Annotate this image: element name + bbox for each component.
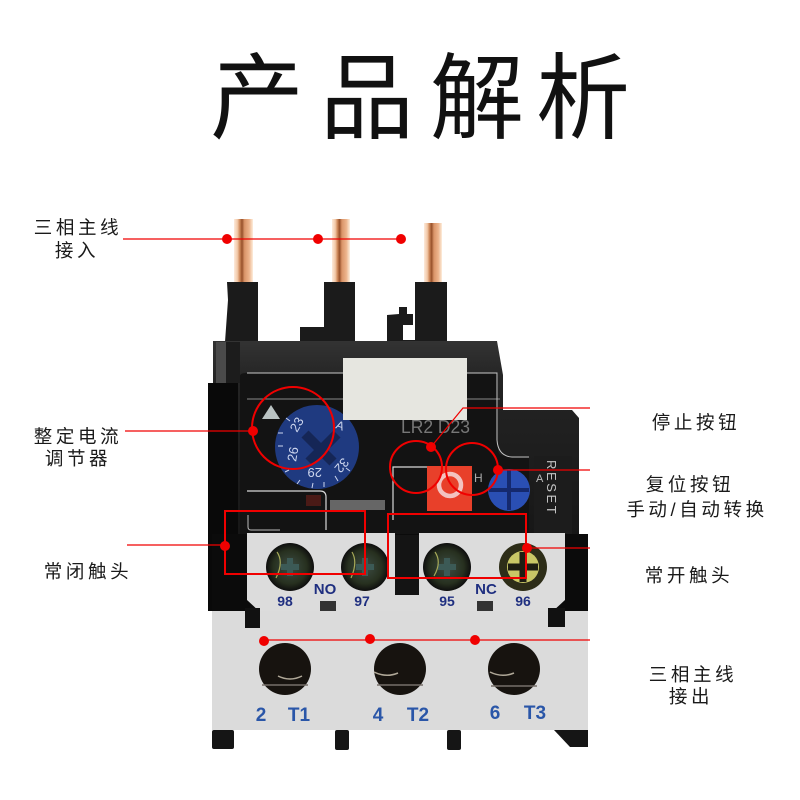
adjustment dial: 32 [331, 455, 352, 476]
lower grey terminal block: 4 [373, 705, 384, 726]
lower grey terminal block [212, 608, 588, 730]
left side wall [208, 383, 238, 611]
front panel [240, 373, 529, 534]
relay upper housing [213, 341, 579, 534]
adjustment dial: A [334, 418, 346, 434]
label: reset button and mode switch: 手动/自动转换 [626, 499, 768, 520]
callout: normally closed contacts [127, 511, 365, 574]
feet [212, 730, 588, 750]
H marker: H [474, 471, 483, 485]
title: 产 [210, 46, 304, 151]
callout: three-phase output [259, 634, 590, 646]
callout: three-phase input [123, 234, 406, 244]
terminal posts [225, 282, 447, 342]
terminal block strip [212, 533, 588, 613]
terminal block strip: 95 [439, 593, 455, 609]
title [210, 46, 630, 151]
stop button [427, 466, 472, 511]
adjustment dial: 23 [287, 414, 307, 434]
adjustment dial: 29 [308, 465, 322, 480]
title: 析 [536, 46, 630, 151]
label: three-phase main output: 三相主线 [649, 664, 737, 685]
lower grey terminal block: T3 [524, 703, 546, 724]
adjustment dial: 26 [284, 446, 301, 463]
title: 解 [430, 46, 524, 151]
reset side panel: A [536, 473, 544, 485]
terminal block strip: 96 [515, 593, 531, 609]
callout: normally open contacts [388, 514, 590, 578]
callout: adjustment dial [125, 387, 334, 469]
label: normally closed contact: 常闭触头 [44, 561, 132, 582]
label: three-phase main output: 接出 [669, 686, 713, 707]
terminal block strip: 97 [354, 593, 370, 609]
label: reset button and mode switch: 复位按钮 [646, 474, 734, 495]
label: current setting regulator: 整定电流 [34, 426, 122, 447]
lower grey terminal block: T2 [407, 705, 429, 726]
adjustment dial [262, 405, 359, 489]
lower grey terminal block: T1 [288, 705, 311, 726]
label: normally open contact: 常开触头 [645, 565, 733, 586]
product: thermal overload relay [208, 219, 588, 750]
reset side panel: RESET [544, 460, 559, 516]
label: three-phase main input: 三相主线 [34, 217, 122, 238]
reset side panel [534, 456, 572, 534]
title: 品 [320, 46, 414, 151]
label: three-phase main input: 接入 [55, 240, 99, 261]
reset screw [488, 469, 530, 511]
terminal block strip: NO [314, 581, 337, 598]
callout: reset button [446, 443, 590, 495]
terminal block strip: 98 [277, 593, 293, 609]
lower grey terminal block: 6 [490, 703, 500, 724]
lower grey terminal block: 2 [256, 705, 266, 726]
terminal block strip: NC [475, 581, 497, 598]
callout: stop button [390, 408, 590, 493]
label: current setting regulator: 调节器 [45, 448, 111, 469]
white nameplate [343, 358, 467, 420]
copper terminals [234, 219, 442, 282]
model text: LR2 D23 [401, 417, 470, 437]
label: stop button: 停止按钮 [652, 412, 740, 433]
